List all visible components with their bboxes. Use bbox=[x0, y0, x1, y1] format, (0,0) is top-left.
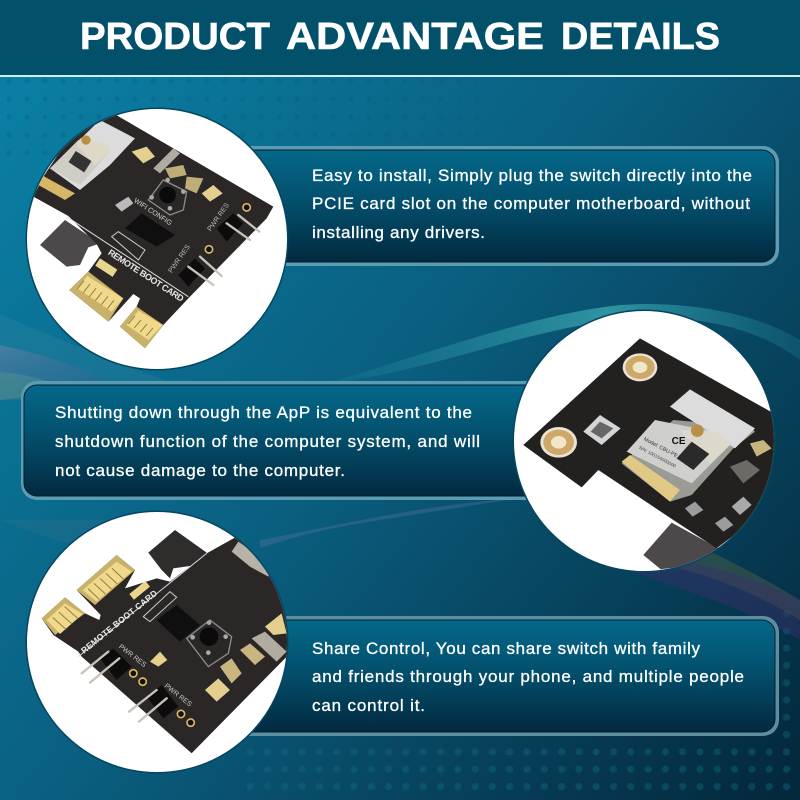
module corner bbox=[232, 542, 273, 577]
photo circle: card rear angle: PWR RES bbox=[117, 643, 147, 669]
panel: share control bbox=[200, 616, 779, 736]
board bbox=[33, 113, 273, 348]
photo circle: card rear angle: PWR RES bbox=[163, 683, 193, 709]
side pads bbox=[750, 440, 772, 457]
text: shutdown description: not cause damage to the computer. bbox=[55, 461, 345, 480]
chip bbox=[125, 213, 175, 247]
bracket tab bbox=[643, 523, 718, 569]
pin headers bbox=[178, 213, 243, 287]
header band bbox=[0, 0, 800, 77]
title: PRODUCT bbox=[80, 16, 270, 58]
board bbox=[42, 537, 290, 753]
text: shutdown description: shutdown function of the computer system, and will bbox=[55, 432, 480, 451]
photo circle: wifi module close-up: CE bbox=[672, 436, 686, 447]
photo circle: wifi module close-up bbox=[512, 310, 777, 572]
text: share description: Share Control, You can share switch with family bbox=[312, 639, 700, 658]
text: share description: can control it. bbox=[312, 696, 425, 715]
text: shutdown description: Shutting down through the ApP is equivalent to the bbox=[55, 403, 472, 422]
mounting holes bbox=[623, 353, 657, 381]
photo circle: card top view: REMOTE BOOT CARD bbox=[106, 247, 186, 304]
title: ADVANTAGE bbox=[286, 16, 544, 58]
silk line and label bbox=[78, 553, 207, 657]
title: DETAILS bbox=[561, 16, 720, 58]
pin headers bbox=[100, 648, 178, 718]
photo circle: card top view: PWR RES bbox=[168, 243, 192, 274]
gold fingers bbox=[42, 597, 85, 635]
text: share description bbox=[312, 639, 744, 715]
text: share description: and friends through your phone, and multiple people bbox=[312, 667, 744, 686]
switch button bbox=[148, 180, 187, 215]
panel: easy to install bbox=[200, 146, 779, 266]
photo circle: card top view: PWR RES bbox=[207, 202, 231, 233]
photo circle: card rear angle: REMOTE BOOT CARD bbox=[79, 588, 159, 656]
module bbox=[622, 420, 755, 502]
photo circle: card rear angle bbox=[26, 510, 290, 774]
photo circle: card top view: WIFI CONFIG bbox=[132, 197, 173, 227]
qr code bbox=[583, 415, 621, 445]
panel: app shutdown bbox=[21, 381, 564, 500]
text: install description: PCIE card slot on the computer motherboard, without bbox=[312, 194, 750, 213]
text: shutdown description bbox=[55, 403, 480, 480]
photo circle: card top view bbox=[26, 108, 288, 370]
photo circle: wifi module close-up: Model: CBU-PE bbox=[642, 436, 679, 460]
bracket tab bbox=[40, 220, 100, 267]
bracket tab bbox=[148, 530, 207, 578]
switch button bbox=[187, 620, 232, 667]
wifi module bbox=[50, 120, 135, 190]
pads and silk bbox=[165, 165, 203, 193]
text: install description: Easy to install, Simply plug the switch directly into the bbox=[312, 166, 752, 185]
silk line and label bbox=[67, 217, 188, 297]
text: install description: installing any drivers. bbox=[312, 223, 485, 242]
board bbox=[523, 338, 777, 548]
title bbox=[80, 16, 720, 58]
photo circle: wifi module close-up: S/N: 100154000000 bbox=[638, 445, 677, 469]
pads and silk bbox=[220, 643, 265, 683]
text: install description bbox=[312, 166, 752, 242]
gold fingers bbox=[69, 272, 123, 322]
chip bbox=[157, 605, 200, 642]
